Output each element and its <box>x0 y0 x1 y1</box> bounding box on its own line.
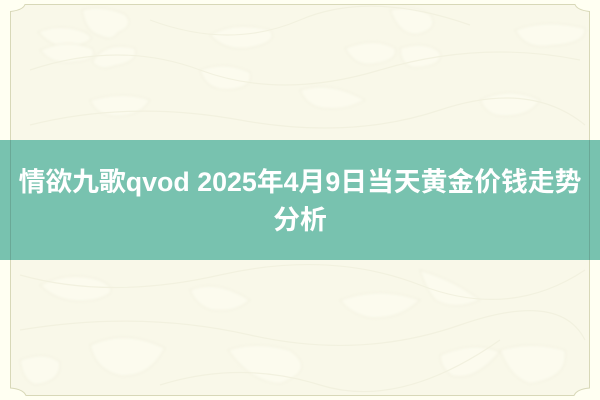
title line 1: 情欲九歌qvod 2025年4月9日当天黄金价钱走势 <box>19 167 581 197</box>
right frame edge <box>589 140 590 260</box>
title line 2: 分析 <box>273 205 327 235</box>
title band <box>0 140 600 260</box>
left frame edge <box>10 140 11 260</box>
